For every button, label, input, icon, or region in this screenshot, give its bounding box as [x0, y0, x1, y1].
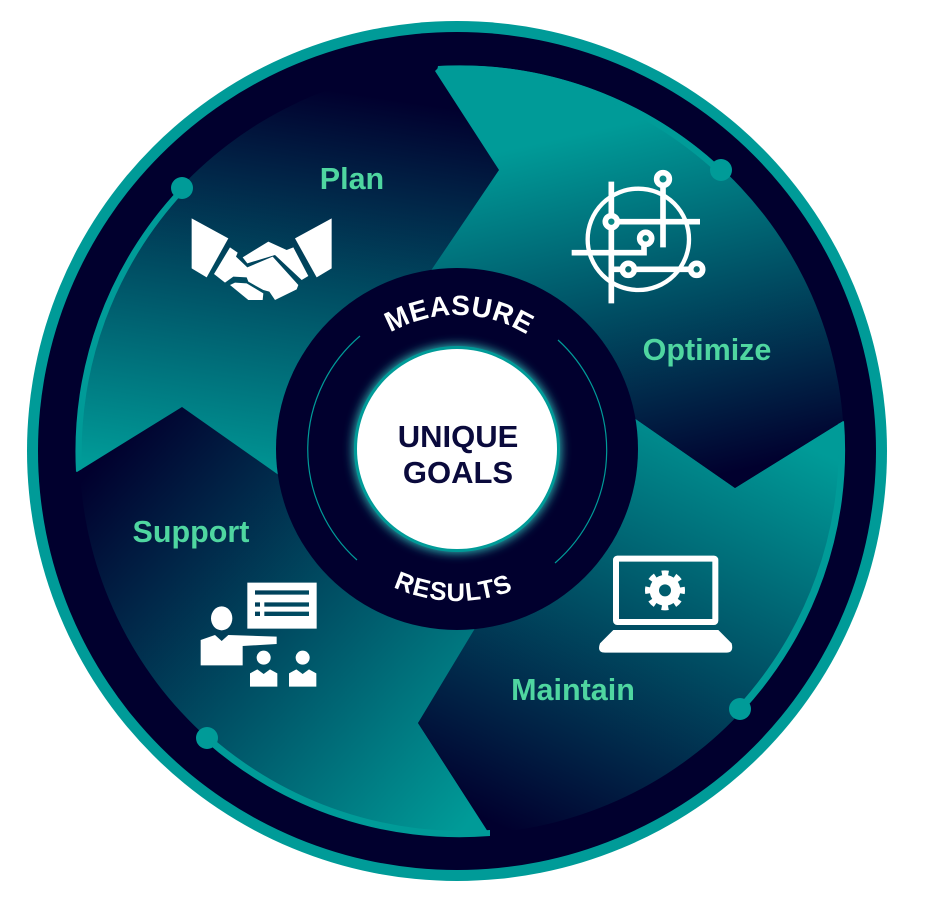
segment: Maintain: [418, 415, 844, 833]
label: Support: Support: [133, 515, 249, 549]
segment: Support: [80, 407, 500, 836]
label: UNIQUE GOALS: [398, 419, 518, 490]
label: UNIQUE GOALS: UNIQUE: [398, 419, 518, 454]
label: RESULTS: RESULTS: [394, 572, 511, 602]
icon: circuit target: [572, 173, 703, 303]
segment: Optimize: [430, 65, 843, 488]
icon: handshake: [192, 218, 332, 300]
segment: Plan: [76, 67, 499, 483]
label: UNIQUE GOALS: GOALS: [403, 455, 513, 490]
icon: laptop with gear: [599, 559, 732, 653]
glow: [353, 345, 561, 553]
label: MEASURE: MEASURE: [384, 296, 534, 334]
label: Plan: Plan: [320, 162, 384, 196]
white disc: [357, 349, 557, 549]
accent arc: Support: [196, 727, 490, 837]
centre hub: [276, 268, 638, 630]
label: Optimize: Optimize: [643, 333, 771, 367]
thin arc right: [555, 340, 607, 563]
label: Maintain: Maintain: [511, 673, 635, 707]
accent arc: Maintain: [729, 421, 845, 720]
accent arc: Optimize: [437, 65, 732, 181]
icon: presenter with audience: [201, 583, 317, 687]
accent arc: Plan: [75, 177, 193, 472]
teal edge: [354, 346, 560, 552]
thin arc left: [308, 336, 360, 560]
